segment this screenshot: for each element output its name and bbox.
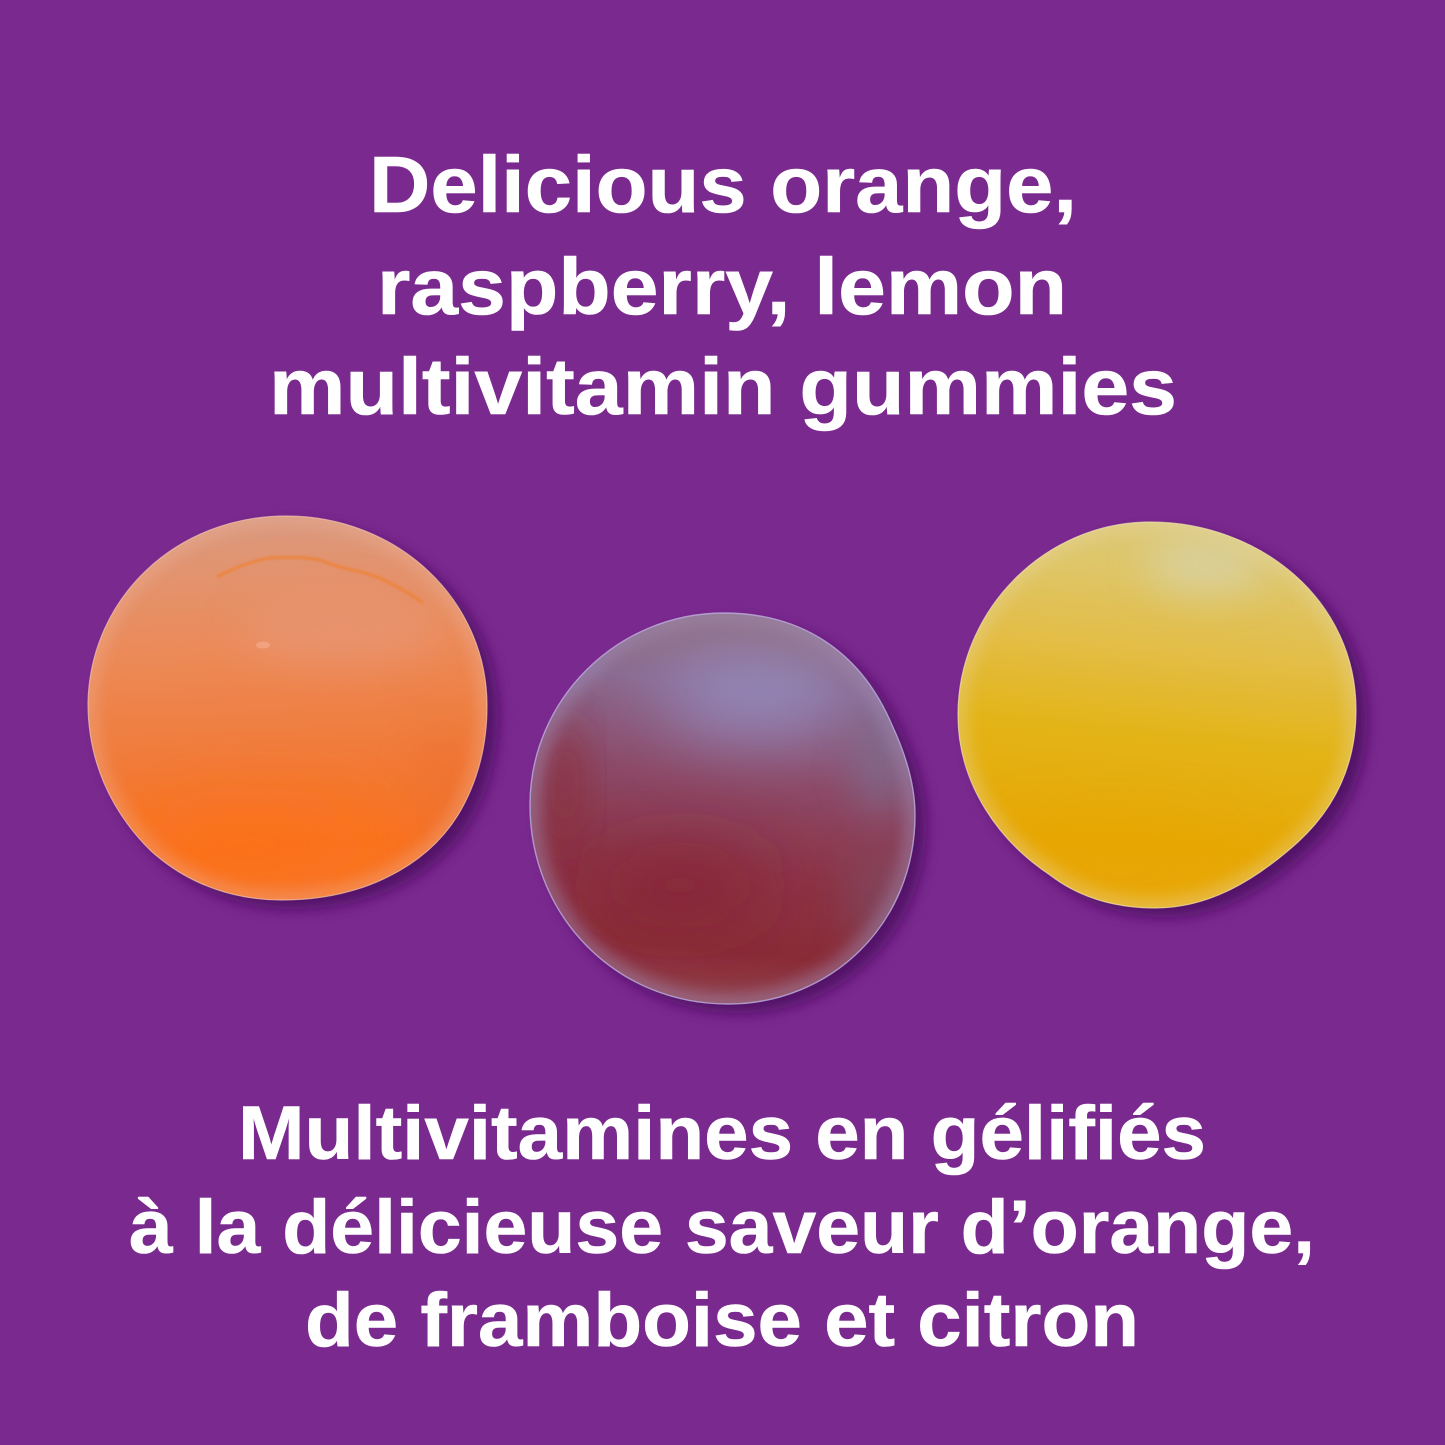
infographic canvas bbox=[87, 154, 1373, 1348]
French heading: de framboise et citron bbox=[305, 1278, 1139, 1363]
gummy: orange bbox=[80, 510, 498, 909]
English heading: raspberry, lemon bbox=[377, 242, 1067, 331]
English heading: Delicious orange, bbox=[369, 140, 1077, 229]
French heading: Multivitamines en gélifiés bbox=[238, 1091, 1206, 1176]
English heading bbox=[269, 140, 1177, 431]
English heading: multivitamin gummies bbox=[269, 342, 1177, 431]
gummy: raspberry bbox=[520, 605, 926, 1013]
gummy: lemon bbox=[950, 515, 1367, 917]
French heading: à la délicieuse saveur d’orange, bbox=[129, 1185, 1315, 1270]
French heading bbox=[129, 1091, 1315, 1363]
